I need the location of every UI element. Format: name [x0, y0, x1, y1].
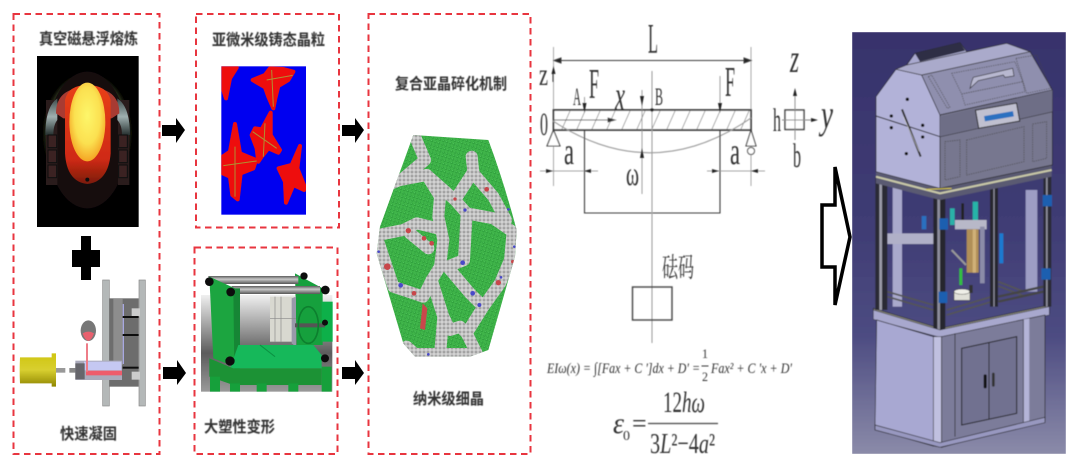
beam with hatching	[553, 110, 751, 130]
beam labels: x	[614, 74, 625, 120]
image: rapid solidification die casting	[20, 280, 145, 406]
panel: composite sub-grain fragmentation mechanism	[368, 14, 530, 454]
deflection curve	[553, 118, 751, 153]
diagram: beam cross-section axes: y	[818, 92, 833, 137]
formula: deflection integral	[546, 346, 793, 384]
housing	[876, 165, 1052, 200]
image: dendritic grains	[221, 66, 306, 215]
beam labels: F	[725, 60, 735, 106]
formula: deflection integral: Fax² + C 'x + D'	[710, 361, 793, 377]
center line	[651, 71, 653, 343]
beam labels: z	[539, 56, 548, 92]
formula: strain: 0	[623, 429, 630, 444]
label: weight with box	[632, 253, 694, 320]
formula: deflection integral: EIω(x) = ∫[Fax + C ']dx + D' =	[546, 361, 700, 377]
side bolts and strap	[890, 98, 924, 155]
beam labels: F	[589, 62, 599, 108]
mechanism	[887, 233, 937, 244]
rear rails	[887, 282, 1024, 315]
image: nanocrystal grain hexagon	[373, 133, 520, 360]
arrow: deformation to composite mechanism	[342, 360, 364, 385]
beam labels: A	[573, 84, 581, 111]
panel: severe plastic deformation	[194, 248, 338, 454]
handle	[970, 68, 1014, 88]
diagram: beam cross-section axes: z	[789, 36, 799, 81]
beam labels: B	[655, 84, 663, 111]
caption: nanoscale fine grains: 纳米级细晶	[413, 389, 484, 408]
lower rail	[872, 306, 1046, 329]
image: levitation melt crucible	[37, 56, 139, 227]
dimension: span L: L	[648, 17, 658, 63]
dimension: a markers	[540, 169, 765, 173]
diagram: beam cross-section axes	[773, 36, 833, 175]
arrow: hollow block arrow to equipment	[822, 167, 850, 305]
beam labels: a	[730, 131, 740, 173]
beam labels	[539, 56, 740, 193]
beam labels: ω	[626, 156, 639, 193]
formula: deflection integral: 2	[702, 369, 708, 384]
load arrows and deflection marker	[552, 66, 722, 194]
icon: plus sign	[72, 236, 100, 280]
image: CAD model of bending equipment	[852, 32, 1066, 454]
beam labels: a	[564, 131, 574, 173]
supports	[547, 130, 756, 154]
panel: submicron as-cast grains	[196, 14, 339, 228]
formula: strain: 12hω	[663, 386, 705, 419]
arrow: grains to composite mechanism	[342, 118, 364, 143]
image: green deformation press	[201, 272, 333, 392]
arrow: melt to as-cast grains	[162, 118, 185, 143]
formula: strain	[613, 386, 718, 460]
diagram: beam cross-section axes: h	[773, 103, 781, 139]
formula: strain: =	[632, 409, 647, 438]
heading: submicron as-cast grains: 亚微米级铸态晶粒	[212, 30, 325, 49]
formula: strain: ε	[613, 407, 624, 440]
window	[976, 103, 1020, 128]
diagram: four-point bending beam	[539, 17, 765, 343]
label: weight with box: 砝码	[662, 253, 694, 283]
frame columns	[893, 187, 902, 307]
dimension: span L	[554, 17, 751, 186]
beam labels: 0	[540, 107, 548, 143]
caption: rapid solidification: 快速凝固	[60, 425, 117, 443]
load hanger	[584, 130, 720, 213]
cabinet	[873, 307, 1049, 337]
formula: deflection integral: 1	[702, 346, 708, 361]
heading: composite sub-grain fragmentation mechanism: 复合亚晶碎化机制	[395, 74, 507, 93]
arrow: rapid solidification to plastic deformation	[163, 360, 186, 385]
caption: severe plastic deformation: 大塑性变形	[204, 417, 275, 436]
panel: vacuum levitation melting and rapid solidification	[14, 14, 160, 454]
heading: vacuum levitation melting: 真空磁悬浮熔炼	[39, 29, 138, 48]
diagram: beam cross-section axes: b	[793, 138, 801, 175]
formula: strain: 3L²−4a²	[650, 428, 715, 460]
posts	[875, 177, 887, 310]
